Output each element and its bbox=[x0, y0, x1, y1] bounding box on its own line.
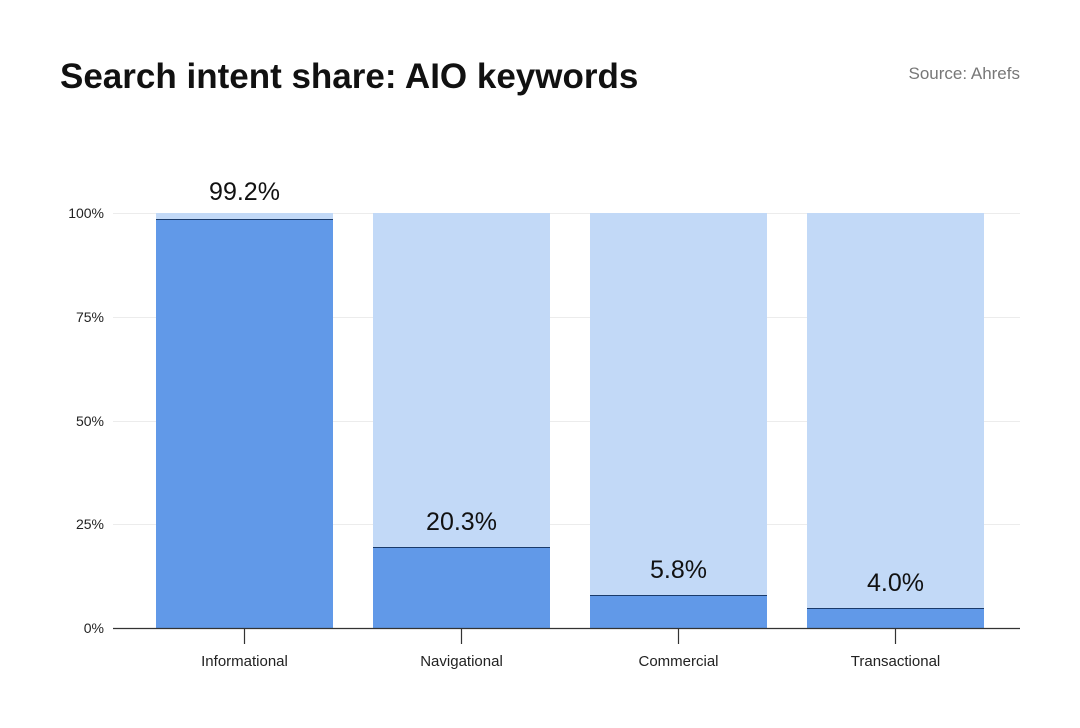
bar: Transactional bbox=[807, 213, 984, 628]
y axis labels: 75% bbox=[76, 309, 104, 325]
bar: Navigational bbox=[373, 213, 550, 628]
category labels: Commercial bbox=[638, 653, 719, 670]
category labels: Informational bbox=[201, 653, 288, 670]
bar chart bbox=[156, 178, 984, 628]
y axis labels: 50% bbox=[76, 413, 104, 429]
bar: Transactional: 4.0% bbox=[867, 569, 924, 597]
bar: Informational bbox=[156, 178, 333, 628]
source note: Source: Ahrefs bbox=[908, 64, 1020, 83]
title: Search intent share: AIO keywords bbox=[60, 57, 638, 96]
y axis labels bbox=[68, 205, 104, 636]
category labels: Navigational bbox=[420, 653, 503, 670]
y axis labels: 100% bbox=[68, 205, 104, 221]
bar: Commercial: 5.8% bbox=[650, 556, 707, 584]
bar: Commercial bbox=[590, 213, 767, 628]
bar: Navigational: 20.3% bbox=[426, 508, 497, 536]
category labels: Transactional bbox=[851, 653, 940, 670]
y axis labels: 25% bbox=[76, 516, 104, 532]
category labels bbox=[201, 653, 940, 670]
x axis bbox=[113, 628, 1020, 644]
y axis labels: 0% bbox=[84, 620, 104, 636]
bar: Informational: 99.2% bbox=[209, 178, 280, 206]
